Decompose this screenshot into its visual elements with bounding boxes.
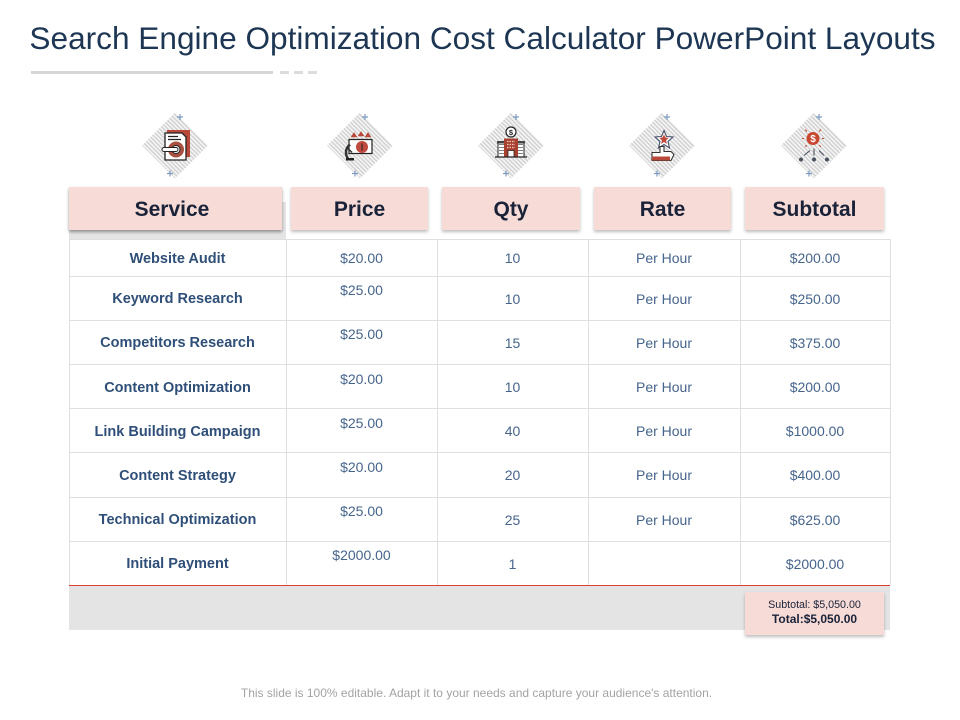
row: Competitors Research: $25.00 bbox=[340, 326, 383, 342]
icon: bank building bbox=[478, 112, 544, 178]
row: Keyword Research: 10 bbox=[505, 291, 520, 307]
row: Initial Payment bbox=[126, 547, 844, 572]
row: Website Audit bbox=[130, 250, 840, 267]
row: Initial Payment: Initial Payment bbox=[126, 556, 229, 572]
row: Content Strategy: $20.00 bbox=[340, 459, 383, 475]
row: Content Strategy: Per Hour bbox=[636, 467, 692, 483]
footer note: This slide is 100% editable. Adapt it to your needs and capture your audience's attention. bbox=[241, 686, 712, 700]
row: Content Strategy: 20 bbox=[505, 467, 520, 483]
row: Website Audit: 10 bbox=[505, 250, 520, 266]
row: Content Optimization: Per Hour bbox=[636, 379, 692, 395]
row: Keyword Research bbox=[112, 282, 840, 307]
row: Link Building Campaign: $1000.00 bbox=[786, 423, 844, 439]
row: Content Optimization: Content Optimization bbox=[104, 380, 251, 396]
header: Qty bbox=[442, 187, 580, 230]
total callout: Total:$5,050.00 bbox=[772, 612, 857, 626]
row: Competitors Research bbox=[100, 326, 840, 351]
row: Link Building Campaign: Link Building Campaign bbox=[95, 424, 260, 440]
row: Initial Payment: $2000.00 bbox=[332, 547, 391, 563]
row: Content Strategy bbox=[119, 459, 840, 484]
row: Initial Payment: $2000.00 bbox=[786, 556, 844, 572]
header: Rate bbox=[594, 187, 731, 230]
header: Subtotal: Subtotal bbox=[772, 198, 856, 221]
header: Price bbox=[291, 187, 428, 230]
row: Link Building Campaign: Per Hour bbox=[636, 423, 692, 439]
row: Website Audit: $200.00 bbox=[790, 250, 840, 266]
row: Content Optimization: 10 bbox=[505, 379, 520, 395]
row: Content Strategy: Content Strategy bbox=[119, 468, 236, 484]
row: Website Audit: Website Audit bbox=[130, 251, 225, 267]
row: Initial Payment: 1 bbox=[509, 556, 516, 572]
row: Website Audit: Per Hour bbox=[636, 250, 692, 266]
total band bbox=[69, 585, 890, 630]
row: Technical Optimization: Per Hour bbox=[636, 512, 692, 528]
row: Technical Optimization: $25.00 bbox=[340, 503, 383, 519]
row: Competitors Research: Per Hour bbox=[636, 335, 692, 351]
row: Link Building Campaign bbox=[95, 415, 844, 440]
row: Link Building Campaign: 40 bbox=[505, 423, 520, 439]
header: Rate: Rate bbox=[640, 198, 685, 221]
header: Price: Price bbox=[334, 198, 385, 221]
row: Content Strategy: $400.00 bbox=[790, 467, 840, 483]
row: Content Optimization bbox=[104, 371, 840, 396]
icon: dollar network bbox=[781, 112, 847, 178]
row: Competitors Research: $375.00 bbox=[790, 335, 840, 351]
icon: money with hand bbox=[327, 112, 393, 178]
row: Content Optimization: $20.00 bbox=[340, 371, 383, 387]
row: Keyword Research: Per Hour bbox=[636, 291, 692, 307]
header: Qty: Qty bbox=[493, 198, 528, 221]
icons row bbox=[142, 113, 846, 178]
row: Keyword Research: $25.00 bbox=[340, 282, 383, 298]
row: Content Optimization: $200.00 bbox=[790, 379, 840, 395]
total callout bbox=[745, 592, 884, 635]
row: Competitors Research: Competitors Research bbox=[100, 335, 255, 351]
header: Service bbox=[69, 187, 282, 230]
row: Competitors Research: 15 bbox=[505, 335, 520, 351]
header: Service: Service bbox=[135, 198, 209, 221]
row: Technical Optimization: 25 bbox=[505, 512, 520, 528]
icon: document with gear bbox=[142, 112, 208, 178]
row: Technical Optimization: $625.00 bbox=[790, 512, 840, 528]
icon: hand with star bbox=[629, 112, 695, 178]
row: Website Audit: $20.00 bbox=[340, 250, 383, 266]
total callout: Subtotal: $5,050.00 bbox=[768, 599, 861, 611]
title: Search Engine Optimization Cost Calculator PowerPoint Layouts bbox=[29, 20, 936, 56]
title underline bbox=[31, 71, 317, 74]
row: Technical Optimization: Technical Optimization bbox=[99, 512, 256, 528]
row: Keyword Research: $250.00 bbox=[790, 291, 840, 307]
row: Technical Optimization bbox=[98, 503, 840, 528]
gray shadow behind service header bbox=[69, 202, 286, 239]
icon: dollar network: $ bbox=[810, 134, 816, 145]
icon: bank building: $ bbox=[509, 128, 514, 137]
row: Link Building Campaign: $25.00 bbox=[340, 415, 383, 431]
row: Keyword Research: Keyword Research bbox=[112, 291, 243, 307]
header: Subtotal bbox=[745, 187, 884, 230]
